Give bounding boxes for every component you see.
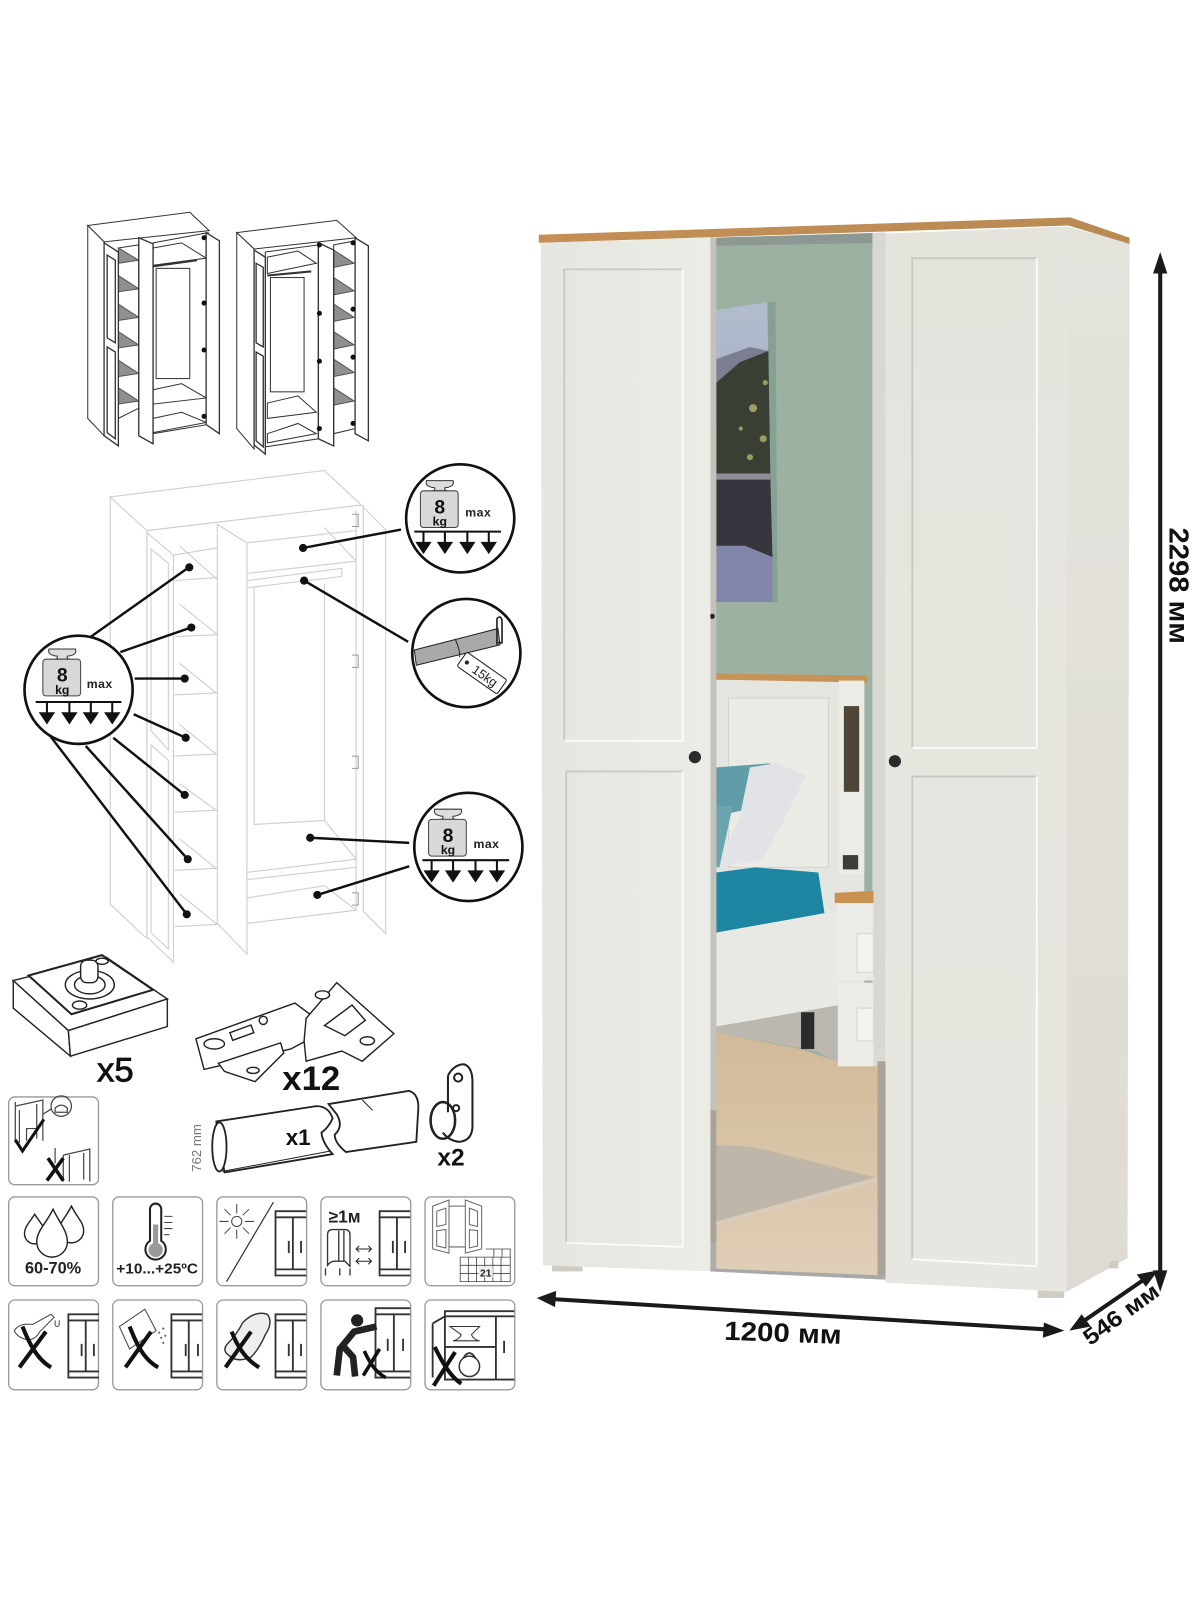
- hardware: hanging rail x1: x1: [286, 1125, 311, 1150]
- reflection: wall picture: [716, 302, 778, 602]
- icon: no direct sunlight: [217, 1197, 307, 1286]
- callout: lower shelves load: [414, 793, 522, 901]
- left door handle: [689, 751, 701, 763]
- reflection: bed headboard and shelf: [716, 233, 886, 1066]
- right door handle: [889, 755, 901, 767]
- left door: [541, 238, 710, 1271]
- line drawing: interior with load callouts: [24, 464, 522, 962]
- dimension: height: 2298 мм: [1163, 528, 1194, 644]
- callout: shelf load left: kg: [55, 683, 69, 697]
- icon: ventilate for 21 days: [425, 1197, 515, 1286]
- photo: wardrobe with mirror door: [539, 217, 1130, 1298]
- callout: rail load 15 kg: 15kg: [469, 662, 501, 690]
- right door lower panel: [912, 777, 1037, 1266]
- icon: humidity 60-70%: [9, 1197, 98, 1286]
- leader lines: [50, 530, 409, 914]
- hinges on wardrobe drawing: [352, 514, 358, 905]
- icon: no wet cloth: [217, 1300, 307, 1390]
- dimension: depth: [1069, 1270, 1164, 1350]
- icon: temperature range: [113, 1197, 203, 1286]
- reflection: nightstand: [835, 891, 873, 1066]
- callout: lower shelves load: 8: [443, 825, 454, 847]
- callout: rail load 15 kg: [412, 599, 520, 707]
- reflection: floor and rug: [710, 1033, 886, 1284]
- hardware: hanging rail x1: 762 mm: [189, 1124, 204, 1172]
- right door: [886, 227, 1066, 1292]
- leader end dots: [181, 544, 321, 918]
- callout: top shelf load: max: [465, 505, 491, 519]
- hardware: rail holder x2: x2: [437, 1144, 465, 1171]
- hardware: furniture foot x5: [13, 955, 167, 1090]
- line drawing: layout with shelves on left: [88, 212, 219, 446]
- callout: top shelf load: kg: [433, 515, 447, 529]
- hardware: furniture foot x5: x5: [97, 1052, 134, 1090]
- left door upper panel: [564, 269, 683, 742]
- icon: do not move loaded wardrobe: [321, 1300, 411, 1390]
- reflection: bed: [716, 867, 843, 1065]
- hardware: hanging rail x1: [189, 1091, 418, 1172]
- right door upper panel: [912, 258, 1037, 748]
- callout: shelf load left: max: [87, 677, 113, 691]
- icon: temperature range: +10...+25ºC: [116, 1261, 198, 1277]
- dimension: height: [1153, 252, 1194, 1292]
- hardware: hinge x12: [196, 983, 394, 1098]
- infographic canvas: [8, 212, 1189, 1390]
- callout: top shelf load: 8: [434, 496, 445, 518]
- dimension: width: 1200 мм: [724, 1316, 842, 1350]
- icon: one metre from heaters: [321, 1197, 411, 1286]
- wardrobe outline in light grey: [110, 470, 386, 962]
- callout: lower shelves load: kg: [441, 843, 455, 857]
- icon: ventilate for 21 days: 21: [480, 1269, 492, 1280]
- line drawing: layout with shelves on right: [237, 220, 368, 454]
- hardware: hinge x12: x12: [282, 1060, 340, 1098]
- reflection: pillows: [716, 763, 806, 867]
- hardware: rail holder x2: [431, 1064, 472, 1171]
- wardrobe side panel: [1066, 227, 1130, 1292]
- callout: top shelf load: [406, 464, 514, 572]
- icon: no abrasive powder: [113, 1300, 203, 1390]
- left door lower panel: [566, 771, 683, 1247]
- icon: no acids or liquids: [9, 1300, 99, 1390]
- icon: humidity 60-70%: 60-70%: [25, 1259, 82, 1277]
- dimension: depth: 546 мм: [1078, 1278, 1164, 1350]
- icon: correct vertical assembly: [9, 1096, 98, 1185]
- callout: shelf load left: 8: [57, 665, 68, 687]
- icon: one metre from heaters: ≥1м: [329, 1206, 361, 1226]
- wardrobe feet: [552, 1261, 1118, 1298]
- icon: no overloading shelves: [425, 1300, 515, 1390]
- wardrobe top board: [539, 217, 1130, 244]
- dimension: width: [537, 1291, 1064, 1350]
- mirror bevel edges: [710, 233, 886, 1284]
- callout: lower shelves load: max: [473, 837, 500, 851]
- callout: shelf load left: [24, 636, 133, 744]
- mirror door with reflection: [710, 233, 886, 1284]
